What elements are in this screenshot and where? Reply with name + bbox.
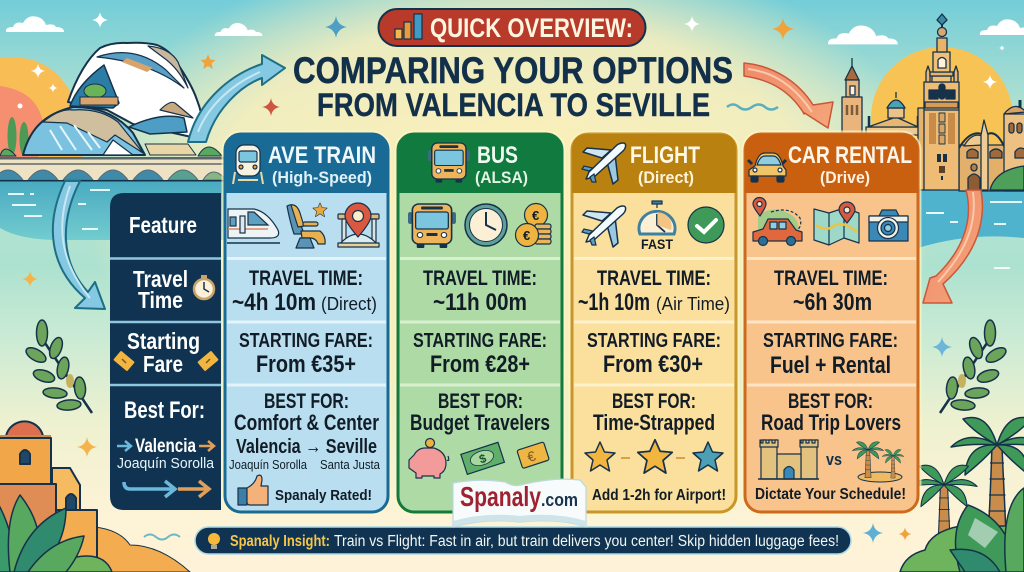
best for bbox=[410, 390, 550, 435]
header text: FLIGHT bbox=[630, 142, 700, 169]
icon: fast stopwatch bbox=[639, 201, 675, 252]
icon: voucher: € bbox=[525, 447, 538, 465]
heading: COMPARING YOUR OPTIONS bbox=[293, 50, 733, 91]
Seville cathedral and Giralda bbox=[842, 14, 1024, 191]
row label: starting fare: Starting bbox=[127, 328, 200, 354]
icon: banknote: $ bbox=[477, 451, 488, 467]
row label: travel time bbox=[133, 266, 188, 313]
route: Valencia station bbox=[117, 436, 215, 472]
water band left bbox=[0, 178, 226, 240]
icon: plane header bbox=[582, 143, 626, 184]
icon: check mark bbox=[688, 207, 724, 243]
row label: feature: Feature bbox=[129, 212, 197, 238]
versus label: vs bbox=[826, 450, 842, 469]
bottom-right foliage bbox=[900, 488, 1024, 572]
starting fare bbox=[763, 330, 898, 379]
best for: Comfort & Center bbox=[234, 410, 379, 435]
starting fare: From €35+ bbox=[256, 351, 356, 378]
icon: train front bbox=[233, 145, 263, 184]
Valencia sun bbox=[0, 57, 86, 157]
icon: clock bbox=[465, 204, 507, 246]
header text bbox=[268, 142, 376, 187]
clouds bbox=[6, 16, 1024, 44]
insight text: Train vs Flight: Fast in air, but train delivers you center! Skip hidden luggage fees! bbox=[334, 533, 839, 550]
icon: castle bbox=[758, 440, 819, 479]
best for: BEST FOR: bbox=[612, 390, 696, 413]
rated label: Spanaly Rated! bbox=[275, 487, 372, 504]
header text: BUS bbox=[477, 142, 518, 169]
row label: travel time: Time bbox=[138, 287, 183, 313]
wall between panel and tower bbox=[918, 108, 925, 190]
travel time: (Air Time) bbox=[656, 294, 730, 314]
best for bbox=[761, 390, 901, 435]
travel time: (Direct) bbox=[321, 294, 377, 314]
travel time: TRAVEL TIME: bbox=[423, 267, 537, 290]
icon: fast stopwatch: FAST bbox=[641, 236, 673, 252]
panel: AVE train bbox=[225, 134, 388, 512]
travel time: ~11h 00m bbox=[433, 289, 527, 316]
travel time bbox=[423, 267, 537, 316]
best for: Budget Travelers bbox=[410, 410, 550, 435]
panel: car rental bbox=[745, 134, 918, 512]
header text: (ALSA) bbox=[475, 168, 528, 187]
best for bbox=[229, 390, 381, 472]
starting fare: STARTING FARE: bbox=[413, 330, 547, 352]
icon: city center pin bbox=[338, 203, 379, 247]
header text: CAR RENTAL bbox=[788, 142, 912, 169]
travel time bbox=[578, 267, 730, 316]
best for bbox=[593, 390, 715, 435]
feature column bbox=[110, 193, 221, 510]
starting fare: STARTING FARE: bbox=[587, 330, 721, 352]
header text bbox=[630, 142, 700, 187]
panel: bus bbox=[398, 134, 562, 512]
title badge: quick overview bbox=[378, 9, 646, 46]
best for: Valencia → Seville bbox=[236, 436, 377, 458]
domed church bbox=[866, 92, 924, 135]
row label: starting fare: Fare bbox=[143, 351, 183, 377]
icon: car header bbox=[748, 153, 786, 182]
arrow: Valencia water to table bbox=[53, 181, 105, 309]
bottom-left foliage bbox=[0, 495, 112, 572]
icon: bar chart bbox=[395, 14, 422, 39]
icon: beach palms bbox=[852, 442, 904, 482]
row label: starting fare bbox=[127, 328, 200, 377]
best for: Santa Justa bbox=[320, 457, 381, 472]
Valencia landmark: Palau de les Arts bbox=[0, 43, 222, 156]
starting fare bbox=[587, 330, 721, 378]
best for: BEST FOR: bbox=[438, 390, 523, 413]
Seville sparkles bbox=[983, 45, 1005, 89]
cathedral body bbox=[959, 100, 1024, 191]
insight bar bbox=[195, 527, 851, 554]
bottom-left Spanish houses bbox=[0, 421, 190, 572]
title badge: quick overview: QUICK OVERVIEW: bbox=[430, 13, 633, 43]
stone bridge bbox=[0, 157, 226, 182]
icon: euro coins: € bbox=[532, 208, 539, 223]
water band right bbox=[915, 190, 1024, 268]
best for: Joaquín Sorolla bbox=[229, 457, 308, 472]
travel time: ~6h 30m bbox=[793, 289, 872, 316]
icon: bus header bbox=[428, 143, 470, 183]
travel time bbox=[774, 267, 888, 316]
travel time: TRAVEL TIME: bbox=[249, 267, 363, 290]
route: Valencia station: Joaquín Sorolla bbox=[117, 455, 215, 472]
icon: folded map bbox=[814, 202, 859, 245]
starting fare: From €28+ bbox=[430, 351, 530, 378]
olive branch right bbox=[940, 320, 1008, 413]
travel time: TRAVEL TIME: bbox=[774, 267, 888, 290]
route: Valencia station: Valencia bbox=[135, 436, 196, 457]
starting fare: STARTING FARE: bbox=[239, 330, 373, 352]
panel: flight bbox=[572, 134, 736, 512]
header text bbox=[475, 142, 528, 187]
Spanaly.com logo: .com bbox=[541, 490, 578, 510]
icon: plane bbox=[582, 206, 626, 247]
icon: euro coins bbox=[516, 204, 551, 246]
Spanaly.com logo bbox=[453, 479, 586, 527]
route arrows bbox=[124, 481, 209, 497]
olive branch left bbox=[24, 320, 92, 413]
icon: euro coins: € bbox=[523, 228, 530, 243]
icon: camera bbox=[869, 210, 908, 241]
starting fare: STARTING FARE: bbox=[763, 330, 898, 352]
Giralda tower bbox=[924, 14, 959, 190]
panel glows bbox=[225, 134, 918, 512]
insight text: Spanaly Insight: bbox=[230, 533, 330, 550]
arrow: title to Seville bbox=[744, 63, 833, 128]
travel time: ~4h 10m bbox=[232, 289, 316, 316]
icon: voucher bbox=[517, 442, 549, 469]
icon: piggy bank bbox=[409, 438, 449, 478]
header text: (Direct) bbox=[638, 168, 694, 187]
header text: (High-Speed) bbox=[272, 168, 372, 187]
Spanaly.com logo: Spanaly bbox=[460, 481, 541, 512]
travel time: TRAVEL TIME: bbox=[597, 267, 711, 290]
row label: best for: Best For: bbox=[124, 397, 205, 424]
icon: thumbs up bbox=[238, 475, 268, 505]
Seville sun bbox=[871, 47, 1013, 189]
icon: banknote bbox=[461, 442, 504, 474]
header text bbox=[788, 142, 912, 187]
icon: comfort seat bbox=[287, 203, 327, 248]
row label: travel time: Travel bbox=[133, 266, 188, 292]
bottom-right palm trees bbox=[911, 417, 1024, 551]
travel time: ~1h 10m bbox=[578, 289, 650, 316]
icon: tickets bbox=[113, 351, 219, 371]
header text: (Drive) bbox=[820, 168, 870, 187]
arrow: Valencia to title bbox=[188, 55, 285, 142]
schedule note: Dictate Your Schedule! bbox=[755, 486, 906, 503]
icon: road trip car bbox=[753, 198, 802, 246]
best for: Time-Strapped bbox=[593, 410, 715, 435]
travel time bbox=[232, 267, 377, 316]
starting fare bbox=[239, 330, 373, 378]
starting fare: Fuel + Rental bbox=[770, 352, 891, 379]
starting fare bbox=[413, 330, 547, 378]
best for: Road Trip Lovers bbox=[761, 410, 901, 435]
icon: bus bbox=[408, 204, 456, 248]
best for: BEST FOR: bbox=[264, 390, 349, 413]
airport note: Add 1-2h for Airport! bbox=[592, 487, 726, 504]
header text: AVE TRAIN bbox=[268, 142, 376, 169]
icon: light bulb bbox=[208, 533, 220, 549]
arrow: Seville to table bbox=[923, 190, 982, 303]
small bell tower bbox=[842, 58, 862, 137]
icon: high-speed train bbox=[227, 209, 280, 243]
heading: FROM VALENCIA TO SEVILLE bbox=[317, 87, 710, 123]
starting fare: From €30+ bbox=[603, 351, 703, 378]
icon: stopwatch bbox=[194, 275, 214, 299]
best for: BEST FOR: bbox=[788, 390, 873, 413]
heading bbox=[293, 50, 733, 123]
icons: rating stars bbox=[585, 440, 723, 473]
